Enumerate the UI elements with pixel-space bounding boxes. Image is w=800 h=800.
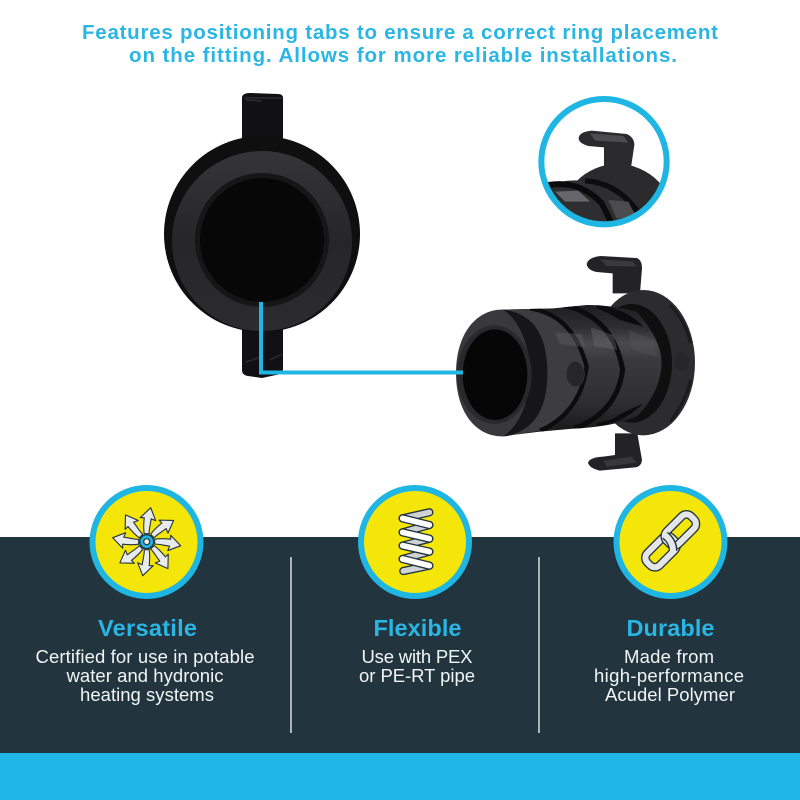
textured section <box>502 308 580 436</box>
dark shoulder <box>597 305 643 426</box>
icon: versatile swirl arrows <box>92 488 200 596</box>
divider lines <box>291 557 539 733</box>
column: durable <box>594 615 744 705</box>
dark panel <box>0 537 800 753</box>
column: flexible <box>359 615 475 686</box>
column: flexible: or PE-RT pipe <box>359 665 475 686</box>
column: versatile: Certified for use in potable <box>36 646 254 667</box>
end cap <box>456 310 547 436</box>
column: flexible: Flexible <box>374 615 462 641</box>
bottom tab <box>588 433 642 471</box>
icon: durable chain link <box>616 488 724 596</box>
top tab <box>587 256 642 293</box>
column: durable: Durable <box>626 615 714 641</box>
column: durable: high-performance <box>594 665 744 686</box>
sealing ribs <box>530 308 587 431</box>
highlights <box>555 333 585 347</box>
column: flexible: Use with PEX <box>362 646 472 667</box>
fitting: side view <box>456 256 695 471</box>
small nub <box>566 361 584 387</box>
icon: flexible spring <box>361 488 469 596</box>
inset: tab close-up <box>538 96 670 228</box>
column: durable: Made from <box>624 646 714 667</box>
heading: Features positioning tabs to ensure a correct ring placement <box>82 21 718 44</box>
connector line <box>261 302 463 372</box>
fitting: front view <box>164 93 360 378</box>
flange <box>592 290 695 435</box>
heading: on the fitting. Allows for more reliable installations. <box>129 44 677 67</box>
column: versatile: heating systems <box>80 684 214 705</box>
column: versatile <box>36 615 254 705</box>
column: versatile: Versatile <box>98 615 197 641</box>
bottom bar <box>0 753 800 800</box>
heading <box>82 21 718 67</box>
column: durable: Acudel Polymer <box>605 684 735 705</box>
column: versatile: water and hydronic <box>66 665 224 686</box>
body <box>500 303 663 437</box>
